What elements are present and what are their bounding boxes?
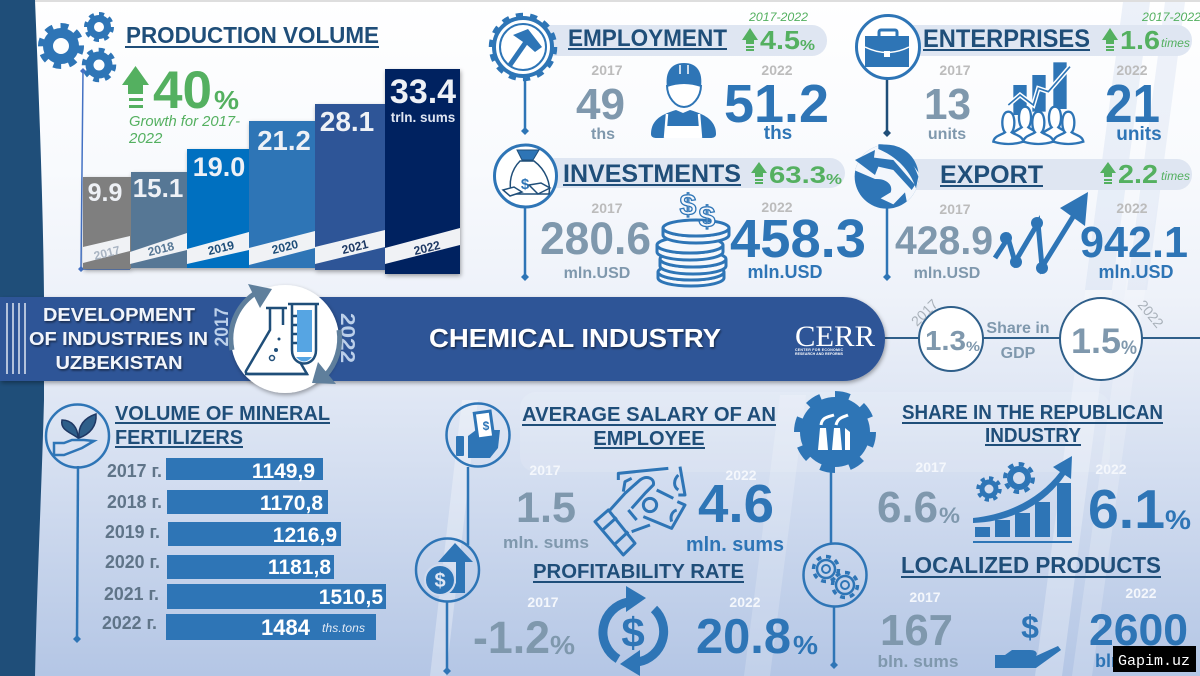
2022 value: 2022	[1116, 200, 1148, 216]
heading: VOLUME OF MINERAL	[115, 403, 330, 425]
bar 2021: 1510,5	[319, 586, 383, 609]
bar 2020: 2020	[270, 237, 300, 257]
2017 value	[877, 459, 960, 532]
icon: globe with arrow	[854, 144, 919, 209]
bar 2021: 28.1	[320, 106, 374, 137]
panel: employment	[490, 10, 829, 144]
2017 value: 49	[576, 80, 625, 129]
bar 2021	[315, 104, 385, 270]
growth callout: %	[214, 85, 239, 115]
watermark: Gapim.uz	[1118, 653, 1190, 670]
2022 value	[1089, 585, 1188, 671]
growth	[742, 10, 815, 55]
bar 2022: 1484	[261, 615, 311, 640]
growth: 4.5	[760, 25, 800, 55]
2017 value: ths	[591, 126, 615, 143]
icon: factory in gear	[798, 395, 872, 469]
2017 value	[924, 62, 971, 143]
bar 2018	[130, 172, 187, 268]
heading	[902, 402, 1163, 447]
heading: EXPORT	[940, 161, 1043, 189]
icon: dollar cycle: $	[621, 609, 645, 656]
icon: hand with money	[595, 467, 685, 555]
panel: average salary	[446, 404, 784, 556]
2017 value: 2017	[909, 589, 941, 605]
2017 value	[878, 589, 958, 671]
2022 value: 21	[1105, 74, 1160, 134]
logo: CERR: RESEARCH AND REFORMS	[795, 352, 844, 356]
2022 value: 2022	[761, 199, 793, 215]
icon: coins: $	[699, 201, 716, 234]
bar 2020: 21.2	[257, 125, 311, 156]
2022 value: 2022	[1125, 585, 1157, 601]
2022 value: mln.USD	[747, 262, 823, 282]
connector end	[883, 273, 891, 281]
2017 value: 2017	[529, 462, 561, 478]
circle 2017: 1.3	[925, 325, 966, 356]
growth: %	[826, 171, 842, 188]
2022 value: mln.USD	[1098, 262, 1174, 282]
bar 2019	[105, 522, 341, 547]
heading	[522, 404, 776, 450]
bar 2022	[385, 69, 460, 274]
2022 value: 2022	[729, 594, 761, 610]
growth	[1102, 10, 1200, 55]
2022 value	[1105, 62, 1162, 145]
series title: UZBEKISTAN	[56, 353, 182, 373]
2022 value: 4.6	[698, 474, 774, 534]
rotating arrows	[231, 284, 340, 384]
pill	[530, 25, 827, 56]
heading: INDUSTRY	[985, 425, 1082, 447]
2017 value: mln. sums	[503, 533, 589, 552]
heading: LOCALIZED PRODUCTS	[901, 552, 1161, 578]
2022 value: bln. sums	[1095, 651, 1179, 671]
2022 value: mln. sums	[686, 534, 784, 556]
2022 value: ths	[764, 123, 792, 144]
2017 value: -1.2	[473, 612, 550, 663]
main title: CHEMICAL INDUSTRY	[429, 323, 721, 353]
growth: 2017-2022	[748, 10, 808, 24]
circle 2017	[919, 307, 983, 371]
bar 2017: 9.9	[88, 179, 122, 207]
icon: coins: $	[680, 189, 697, 222]
growth callout	[122, 61, 240, 147]
2022 value	[1088, 461, 1191, 540]
banner shape	[0, 297, 885, 381]
bar 2020	[249, 121, 315, 268]
bar 2021	[104, 584, 386, 609]
icon: worker	[651, 63, 716, 138]
icon: dollar with up arrow	[416, 538, 479, 602]
bar 2020	[105, 552, 334, 579]
2017 value: 167	[880, 606, 953, 655]
growth	[1100, 159, 1190, 189]
bar 2022: ths.tons	[322, 621, 365, 635]
icon: hand with dollar	[995, 609, 1061, 668]
growth: 2.2	[1118, 159, 1158, 189]
connector end	[883, 129, 891, 137]
2017 value: %	[939, 503, 960, 528]
bar 2020: 2020 г.	[105, 552, 160, 572]
logo: CERR: CENTER FOR ECONOMIC	[795, 348, 843, 352]
circle 2022: 1.5	[1071, 322, 1121, 361]
2017 value: 2017	[527, 594, 559, 610]
bar 2022: 2022 г.	[102, 613, 157, 633]
heading: INVESTMENTS	[563, 160, 741, 188]
bar 2019	[187, 149, 249, 268]
growth callout: 2022	[128, 130, 163, 147]
2022 value	[1080, 200, 1188, 282]
logo: CERR: CERR	[795, 320, 875, 353]
circle 2022	[1060, 298, 1142, 380]
connector	[830, 470, 832, 543]
icon: interlocking gears	[804, 544, 866, 606]
circle 2022: %	[1121, 338, 1137, 359]
label share in GDP	[986, 320, 1050, 362]
2017 value: 2017	[915, 459, 947, 475]
2022 value: 942.1	[1080, 218, 1188, 267]
icon: hand with plant	[46, 404, 109, 468]
bar 2017	[107, 458, 323, 483]
2017 value: bln. sums	[878, 652, 958, 671]
2022 value	[696, 594, 818, 664]
2017 value: %	[550, 630, 575, 660]
growth: 2017-2022	[1141, 10, 1200, 24]
connector	[886, 79, 888, 131]
2022 value: 6.1	[1088, 478, 1165, 540]
connector	[467, 467, 469, 545]
connector	[524, 80, 526, 130]
bar 2017: 2017 г.	[107, 461, 162, 481]
growth: times	[1161, 169, 1190, 183]
2017 value	[503, 462, 589, 552]
bar 2018: 2018	[146, 239, 176, 259]
year 2017: 2017	[212, 308, 233, 346]
panel: investments	[494, 145, 866, 286]
icon: money bag: $	[521, 176, 530, 193]
bar 2017: 2017	[92, 243, 122, 263]
bar 2019: 1216,9	[273, 524, 337, 547]
2017 value: 13	[924, 80, 971, 129]
axis	[78, 68, 130, 272]
2017 value: 1.5	[516, 484, 576, 532]
growth callout: 40	[153, 61, 212, 120]
2022 value: 2022	[761, 62, 793, 78]
white circle	[231, 285, 339, 393]
heading: SHARE IN THE REPUBLICAN	[902, 402, 1163, 424]
bar 2022	[102, 613, 376, 640]
2017 value: units	[928, 126, 966, 143]
2022 value: 20.8	[696, 610, 791, 664]
2017 value: 428.9	[895, 219, 993, 263]
bar 2022: 33.4	[390, 73, 456, 111]
heading: PROFITABILITY RATE	[533, 561, 744, 583]
connector end	[443, 667, 451, 675]
bar 2021: 2021 г.	[104, 584, 159, 604]
connector end	[830, 661, 838, 669]
2022 value: %	[793, 630, 818, 660]
2017 value: mln.USD	[914, 265, 980, 282]
bar 2018: 2018 г.	[107, 492, 162, 512]
circle 2017: %	[966, 338, 981, 354]
2022 value: 2022	[725, 467, 757, 483]
2017 value: 280.6	[540, 213, 651, 264]
panel: share in republican industry	[798, 395, 1191, 543]
bar 2019: 2019 г.	[105, 522, 160, 542]
growth	[751, 162, 842, 189]
growth: 63.3	[769, 162, 826, 189]
2017 value	[895, 201, 993, 282]
connector end	[73, 635, 81, 643]
heading: EMPLOYEE	[593, 428, 705, 450]
2017 value: 2017	[591, 62, 623, 78]
pill	[540, 158, 845, 188]
2022 value: 2022	[1095, 461, 1127, 477]
icon: hand with banknote	[446, 404, 510, 466]
icon: dollar with up arrow: $	[434, 570, 446, 592]
2017 value	[540, 200, 651, 282]
growth callout: Growth for 2017-	[129, 113, 240, 130]
connector	[524, 207, 526, 276]
icon: coins	[657, 189, 729, 286]
panel: export	[852, 144, 1192, 282]
icon: chemistry flask and test tube	[245, 304, 319, 374]
2022 value: 458.3	[730, 209, 866, 269]
2022 value: 2600	[1089, 606, 1188, 655]
2022 value	[686, 467, 784, 556]
bar 2022: 2022	[412, 238, 442, 258]
label share in GDP: GDP	[1001, 345, 1036, 362]
bar 2021: 2021	[340, 237, 370, 257]
GDP connector line	[880, 337, 1200, 339]
heading: AVERAGE SALARY OF AN	[522, 404, 776, 426]
panel: profitability rate	[416, 538, 818, 676]
bar 2018: 1170,8	[260, 492, 323, 515]
connector end	[521, 127, 529, 135]
label 2017: 2017	[908, 296, 941, 329]
pill	[895, 25, 1192, 56]
icon: briefcase	[856, 16, 920, 78]
year 2022: 2022	[336, 313, 358, 363]
heading: FERTILIZERS	[115, 427, 243, 449]
2017 value: 6.6	[877, 483, 938, 532]
growth: %	[800, 37, 815, 54]
heading: production volume: PRODUCTION VOLUME	[126, 22, 379, 48]
connector end	[521, 273, 529, 281]
icon: growth chart with gears	[973, 456, 1072, 543]
bar 2017	[83, 177, 131, 269]
icon: rising line with globes	[995, 192, 1088, 274]
2017 value	[473, 594, 575, 663]
bar 2018	[107, 490, 328, 515]
series title	[29, 305, 208, 373]
panel: enterprises	[856, 10, 1200, 145]
bar 2020: 1181,8	[268, 556, 331, 579]
growth: 1.6	[1120, 25, 1160, 55]
connector	[886, 205, 888, 276]
title banner	[0, 284, 885, 393]
2022 value: %	[1165, 505, 1191, 535]
label 2022: 2022	[1135, 297, 1167, 331]
watermark	[1113, 646, 1196, 672]
icon: gears	[41, 14, 114, 80]
2022 value: units	[1116, 124, 1162, 145]
bar 2019: 2019	[206, 238, 236, 258]
panel: share in GDP	[908, 296, 1167, 380]
bar 2022: trln. sums	[391, 110, 455, 125]
bar 2017: 1149,9	[252, 460, 315, 483]
bar chart: production by year	[83, 69, 460, 274]
2017 value: mln.USD	[564, 265, 630, 282]
series title: DEVELOPMENT	[43, 305, 195, 325]
label share in GDP: Share in	[986, 320, 1050, 337]
left side band	[0, 0, 44, 676]
2017 value: 2017	[939, 62, 971, 78]
growth: times	[1161, 36, 1190, 50]
heading: EMPLOYMENT	[568, 25, 727, 52]
bar 2018: 15.1	[133, 173, 183, 203]
icon: money bag	[494, 145, 556, 207]
panel: localized products	[804, 544, 1188, 671]
2017 value: 2017	[939, 201, 971, 217]
connector	[833, 607, 835, 664]
2017 value: 2017	[591, 200, 623, 216]
series title: OF INDUSTRIES IN	[29, 329, 208, 349]
icon: hand with dollar: $	[1021, 609, 1039, 645]
2017 value	[576, 62, 625, 143]
pill	[895, 159, 1192, 190]
heading	[115, 403, 330, 449]
panel: production volume	[41, 14, 460, 274]
icon: dollar cycle	[603, 586, 664, 676]
connector	[77, 466, 78, 638]
icon: chart and people	[993, 62, 1083, 144]
heading: ENTERPRISES	[923, 25, 1090, 53]
bar 2019: 19.0	[193, 152, 245, 182]
banner stripes	[7, 303, 25, 374]
2022 value: 51.2	[724, 74, 829, 134]
icon: hand with banknote: $	[483, 419, 490, 433]
icon: hammer in gear	[490, 14, 556, 80]
panel: mineral fertilizers	[46, 403, 386, 643]
connector	[446, 602, 448, 670]
2022 value: 2022	[1116, 62, 1148, 78]
